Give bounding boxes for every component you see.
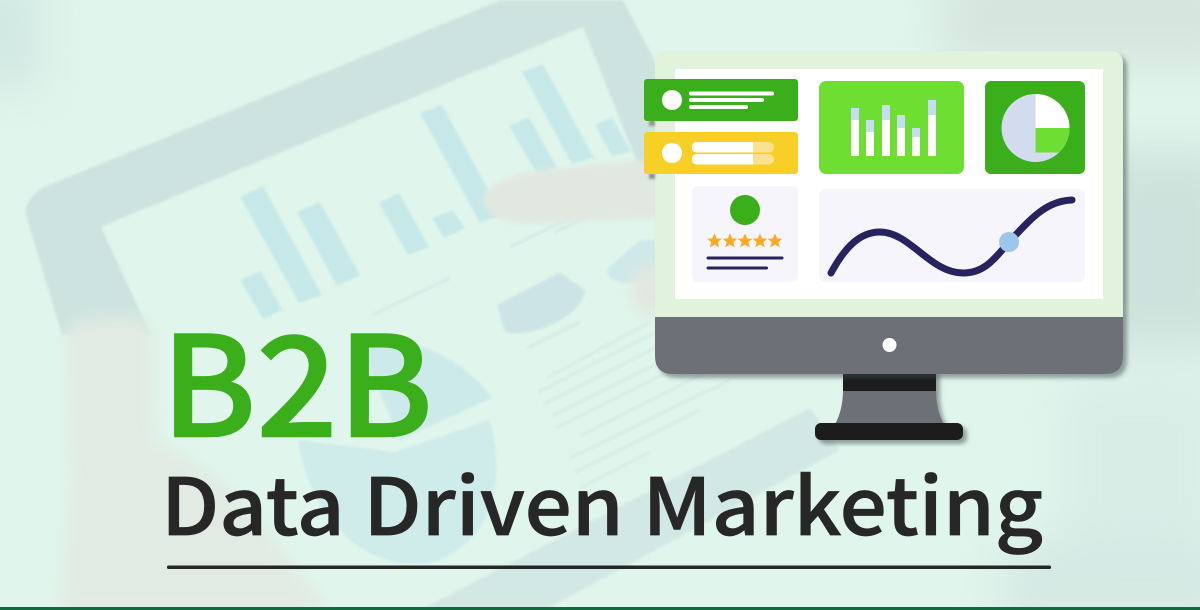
monitor screen <box>675 69 1103 299</box>
line chart card <box>819 189 1085 282</box>
document text lines <box>538 320 730 488</box>
rating card <box>692 186 798 282</box>
green list card <box>644 79 798 121</box>
monitor stand <box>815 370 963 440</box>
card shadows <box>649 120 655 179</box>
title underline <box>167 566 1051 569</box>
hand <box>60 317 330 610</box>
tablet pie <box>355 335 492 440</box>
finger <box>482 158 660 224</box>
heading: Data Driven Marketing: Data Driven Marketing <box>161 443 1043 558</box>
tablet frame <box>26 0 656 335</box>
pie chart card <box>985 81 1085 174</box>
monitor <box>644 51 1123 440</box>
small 3d pie <box>497 272 585 334</box>
bar chart card <box>819 81 964 174</box>
tablet bars <box>240 64 631 319</box>
bottom border <box>0 607 1200 610</box>
monitor body <box>655 51 1123 374</box>
monitor camera dot <box>882 338 896 352</box>
yellow list card <box>644 132 798 174</box>
star rating <box>707 234 782 247</box>
heading: B2B: B2B <box>161 276 433 478</box>
